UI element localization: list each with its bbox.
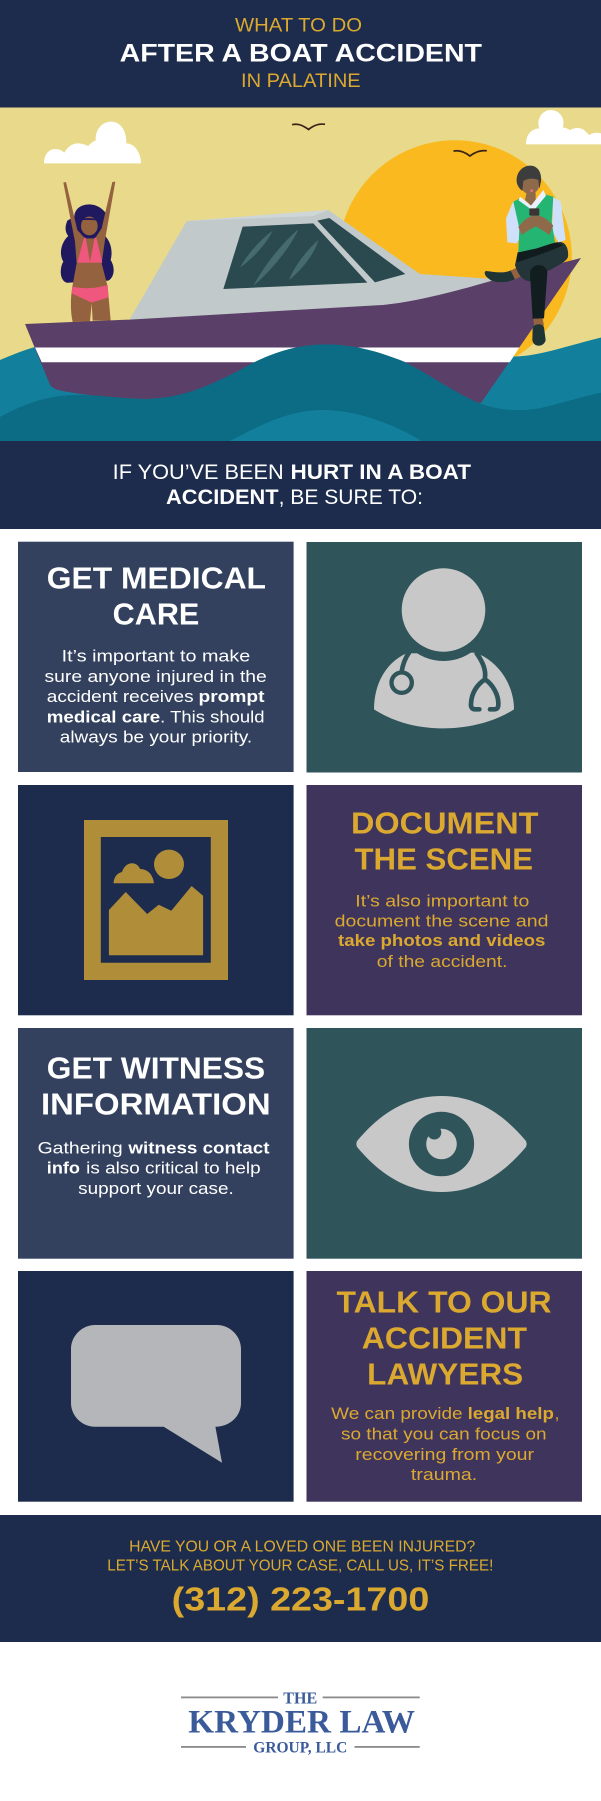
text: witness description bbox=[38, 1138, 270, 1198]
intro text: ACCIDENT bbox=[166, 486, 279, 509]
panel: document the scene bbox=[306, 785, 582, 1015]
illustration: boat accident scene bbox=[0, 108, 601, 441]
phone number: (312) 223-1700 bbox=[172, 1581, 429, 1618]
panel: photo icon bbox=[18, 785, 294, 1015]
call to action band bbox=[0, 1515, 601, 1642]
heading: talk to our accident lawyers: TALK TO OUR bbox=[336, 1285, 552, 1319]
panel: doctor icon bbox=[306, 542, 582, 772]
text: medical care description bbox=[44, 646, 267, 747]
text: medical care description: It’s important to make bbox=[62, 646, 250, 665]
icon: eye bbox=[356, 1096, 527, 1192]
intro text bbox=[113, 461, 471, 509]
icon: doctor with stethoscope bbox=[374, 559, 514, 728]
text: document description: It’s also important to bbox=[355, 891, 529, 910]
heading: talk to our accident lawyers: ACCIDENT bbox=[362, 1321, 527, 1355]
text: medical care description: sure anyone injured in the bbox=[44, 667, 267, 686]
boat hull bbox=[25, 258, 581, 403]
call to action text bbox=[107, 1538, 493, 1574]
icon: bird two bbox=[453, 151, 487, 156]
title: IN PALATINE bbox=[241, 71, 361, 92]
boat cabin bbox=[130, 210, 494, 320]
heading: talk to our accident lawyers: LAWYERS bbox=[367, 1357, 523, 1391]
text: medical care description: prompt bbox=[198, 687, 265, 706]
panel: get witness information bbox=[18, 1028, 294, 1259]
text: document description: document the scene and bbox=[335, 911, 548, 930]
text: lawyers description bbox=[331, 1404, 559, 1484]
man on the bow bbox=[485, 166, 568, 346]
text: witness description: support your case. bbox=[78, 1179, 234, 1198]
heading: get medical care: GET MEDICAL bbox=[47, 562, 266, 596]
sun bbox=[338, 140, 572, 374]
text: witness description: witness contact bbox=[127, 1138, 270, 1157]
heading: document the scene bbox=[351, 806, 539, 876]
windshield glints bbox=[240, 229, 318, 286]
title: WHAT TO DO bbox=[235, 16, 362, 37]
text: lawyers description: legal help bbox=[468, 1404, 554, 1423]
text: lawyers description: , bbox=[555, 1404, 559, 1423]
title bbox=[120, 16, 482, 92]
intro text: HURT IN A BOAT bbox=[290, 461, 471, 484]
logo: the kryder law group: GROUP, LLC bbox=[253, 1739, 347, 1756]
windshield bbox=[223, 223, 367, 289]
logo: the kryder law group: THE bbox=[283, 1688, 317, 1707]
heading: get witness information: INFORMATION bbox=[41, 1088, 271, 1122]
intro band bbox=[0, 441, 601, 529]
intro text: , BE SURE TO: bbox=[279, 486, 423, 509]
intro text: IF YOU’VE BEEN bbox=[113, 461, 284, 484]
text: lawyers description: We can provide bbox=[331, 1404, 463, 1423]
logo: the kryder law group: KRYDER LAW bbox=[188, 1705, 415, 1741]
side window bbox=[317, 218, 405, 282]
text: witness description: Gathering bbox=[38, 1138, 123, 1157]
icon: right cloud bbox=[526, 110, 601, 144]
text: document description: take photos and videos bbox=[338, 931, 545, 950]
cabin roof highlight bbox=[187, 210, 328, 221]
text: document description: of the accident. bbox=[377, 952, 508, 971]
text: lawyers description: so that you can focus on bbox=[341, 1424, 547, 1443]
panel: eye icon bbox=[306, 1028, 582, 1259]
hull stripe bbox=[35, 348, 519, 362]
icon: framed picture bbox=[84, 820, 228, 980]
heading: get medical care: CARE bbox=[113, 598, 199, 632]
front wave bbox=[0, 344, 601, 441]
panel: get medical care bbox=[18, 542, 294, 772]
header banner bbox=[0, 0, 601, 108]
windows and glints bbox=[223, 218, 405, 289]
text: witness description: info bbox=[47, 1158, 80, 1177]
heading: document the scene: DOCUMENT bbox=[351, 806, 539, 840]
heading: get medical care bbox=[47, 562, 266, 632]
back wave bbox=[0, 338, 601, 441]
panel: speech bubble icon bbox=[18, 1271, 294, 1502]
text: witness description: is also critical to help bbox=[86, 1158, 261, 1177]
heading: talk to our accident lawyers bbox=[336, 1285, 552, 1391]
logo: the kryder law group bbox=[181, 1688, 420, 1756]
bottom wave bbox=[230, 410, 422, 441]
text: lawyers description: trauma. bbox=[411, 1465, 477, 1484]
text: medical care description: medical care bbox=[47, 708, 160, 727]
title: AFTER A BOAT ACCIDENT bbox=[120, 39, 482, 67]
text: document description bbox=[335, 891, 548, 971]
panel: talk to our accident lawyers bbox=[306, 1271, 582, 1502]
woman in bikini bbox=[61, 182, 115, 322]
call to action text: HAVE YOU OR A LOVED ONE BEEN INJURED? bbox=[129, 1538, 476, 1555]
icon: left cloud bbox=[44, 122, 141, 163]
icon: bird one bbox=[292, 124, 325, 129]
heading: document the scene: THE SCENE bbox=[354, 842, 533, 876]
icon: speech bubble bbox=[71, 1325, 241, 1463]
text: medical care description: always be your priority. bbox=[60, 728, 252, 747]
heading: get witness information bbox=[41, 1052, 271, 1122]
text: lawyers description: recovering from your bbox=[355, 1445, 534, 1464]
call to action text: LET’S TALK ABOUT YOUR CASE, CALL US, IT’S FREE! bbox=[107, 1557, 493, 1574]
heading: get witness information: GET WITNESS bbox=[47, 1052, 265, 1086]
text: medical care description: accident receives bbox=[47, 687, 194, 706]
text: medical care description: . This should bbox=[160, 708, 264, 727]
